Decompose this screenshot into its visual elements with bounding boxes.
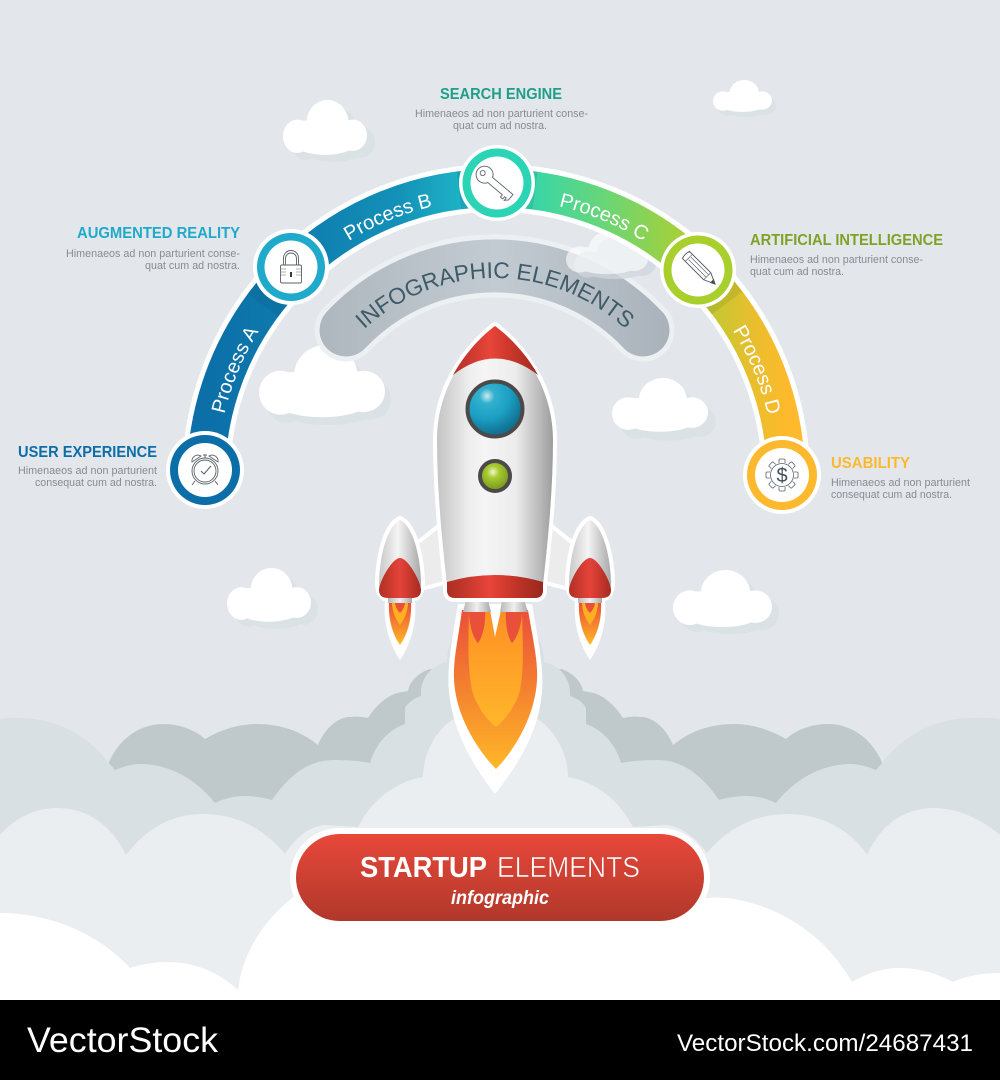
left booster bbox=[379, 520, 421, 603]
nose cone bbox=[453, 326, 538, 375]
text: usability: consequat cum ad nostra. bbox=[831, 489, 952, 501]
text: augmented reality: Himenaeos ad non parturient conse- bbox=[66, 248, 240, 260]
smoke layer: light bbox=[0, 718, 1000, 1000]
process arc bbox=[206, 188, 786, 478]
text: artificial intelligence: Himenaeos ad non parturient conse- bbox=[750, 254, 923, 266]
pill heading: ELEMENTS bbox=[497, 852, 640, 884]
watermark bar: VectorStock bbox=[27, 1021, 219, 1060]
text: user experience: Himenaeos ad non parturient bbox=[18, 465, 157, 477]
label: Process D: Process D bbox=[734, 324, 780, 413]
fins bbox=[417, 524, 573, 589]
cloud: lower right bbox=[673, 570, 779, 634]
body base bbox=[447, 575, 543, 598]
text: search engine bbox=[415, 86, 588, 132]
pill subheading: infographic bbox=[451, 888, 549, 909]
cloud: translucent over banner bbox=[566, 231, 656, 279]
smoke layer: dark back bbox=[109, 669, 882, 900]
text: usability: Himenaeos ad non parturient bbox=[831, 477, 970, 489]
text: user experience: USER EXPERIENCE bbox=[18, 444, 157, 461]
text: search engine: quat cum ad nostra. bbox=[453, 120, 547, 132]
label: Process B: Process B bbox=[343, 194, 431, 240]
text: augmented reality: quat cum ad nostra. bbox=[145, 260, 240, 272]
text: augmented reality bbox=[66, 225, 241, 272]
window: blue bbox=[468, 382, 522, 436]
node: search engine bbox=[459, 145, 535, 221]
text: user experience: consequat cum ad nostra. bbox=[35, 477, 157, 489]
main flame bbox=[448, 604, 542, 794]
icon: pencil bbox=[682, 251, 719, 288]
watermark bar bbox=[0, 1000, 1000, 1080]
rocket body bbox=[437, 326, 553, 598]
label: Process A: Process A bbox=[212, 329, 259, 412]
text: search engine: Himenaeos ad non parturient conse- bbox=[415, 108, 588, 120]
icon: key bbox=[473, 163, 517, 203]
text: augmented reality: AUGMENTED REALITY bbox=[77, 225, 241, 242]
text: artificial intelligence: quat cum ad nostra. bbox=[750, 266, 844, 278]
cloud: top right bbox=[713, 80, 776, 117]
cloud: top left bbox=[283, 100, 375, 162]
icon: padlock bbox=[280, 251, 302, 283]
node: user experience bbox=[166, 431, 244, 509]
pill heading: STARTUP bbox=[360, 852, 487, 884]
smoke layer: white front bbox=[0, 897, 1000, 1000]
watermark bar: VectorStock.com/24687431 bbox=[677, 1030, 973, 1057]
title pill bbox=[290, 828, 710, 927]
inner banner: infographic elements bbox=[314, 234, 674, 362]
cloud: lower left bbox=[227, 568, 318, 629]
banner title: INFOGRAPHIC ELEMENTS bbox=[355, 262, 634, 328]
cloud: centre right bbox=[612, 378, 716, 441]
text: usability: USABILITY bbox=[831, 455, 911, 472]
right booster bbox=[569, 520, 611, 603]
cloud: centre left bbox=[259, 345, 391, 425]
left booster flame bbox=[385, 600, 415, 660]
nozzles bbox=[463, 600, 528, 612]
node: augmented reality bbox=[253, 229, 329, 305]
text: user experience bbox=[18, 444, 157, 489]
smoke layer: mid bbox=[0, 632, 1000, 1000]
text: artificial intelligence: ARTIFICIAL INTELLIGENCE bbox=[750, 232, 943, 249]
window: green bbox=[480, 461, 510, 491]
icon: gear with dollar: $ bbox=[776, 465, 788, 487]
right booster flame bbox=[575, 600, 605, 660]
icon: alarm clock bbox=[192, 455, 218, 485]
text: search engine: SEARCH ENGINE bbox=[440, 86, 562, 103]
label: Process C: Process C bbox=[560, 193, 648, 240]
rocket bbox=[379, 326, 611, 794]
node: usability bbox=[743, 436, 821, 514]
text: artificial intelligence bbox=[750, 232, 943, 278]
node: artificial intelligence bbox=[660, 232, 736, 308]
text: usability bbox=[831, 455, 970, 501]
